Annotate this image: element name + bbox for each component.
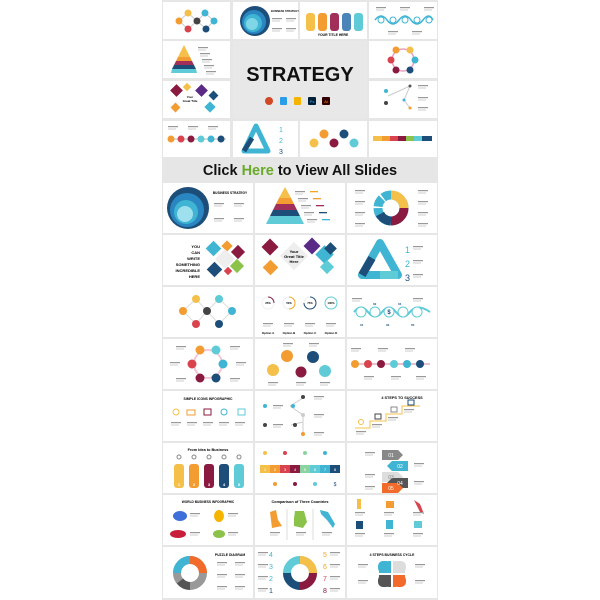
grid row 2: you can write: SOMETHING <box>176 262 200 267</box>
grid row 6: from idea to business: 3 <box>208 482 211 487</box>
grid row 2: you can write: HERE <box>189 274 200 279</box>
grid: percent rings: 75% <box>307 301 313 305</box>
top slide: hexagon circles <box>163 2 230 39</box>
grid: comparison of three countries: Comparison of Three Countries <box>272 500 328 504</box>
grid row 5: simple icons: SIMPLE ICONS INFOGRAPHIC <box>184 397 233 401</box>
top slide: triangle 123 <box>233 121 298 157</box>
grid row 2: you can write <box>163 235 253 285</box>
grid: 8 step arrow bar: $ <box>334 482 337 488</box>
grid row 6: from idea to business: 5 <box>238 482 241 487</box>
grid: 4 circles wave <box>255 339 345 389</box>
app icons: Ai <box>324 99 328 104</box>
grid: chevrons 01-05: 02 <box>397 464 403 470</box>
grid: triangle 123 <box>347 235 437 285</box>
app icons <box>265 97 330 105</box>
grid: 8 segment ring: 5 <box>323 552 327 559</box>
grid row 7: world business <box>163 495 253 545</box>
grid: 8 step arrow bar: 4 <box>294 467 297 472</box>
grid: 8 segment ring: 4 <box>269 552 273 559</box>
grid: percent rings: 50% <box>286 301 292 305</box>
grid: 8 segment ring: 6 <box>323 564 327 571</box>
top slide: ring of circles <box>369 41 437 78</box>
center panel: STRATEGY title: STRATEGY <box>246 64 354 86</box>
grid row 2: you can write: INCREDIBLE <box>176 268 200 273</box>
grid: your great title: Here <box>290 259 299 264</box>
grid: your great title: Great Title <box>284 254 305 259</box>
top slide: diamonds <box>163 81 230 118</box>
grid row 7: world business: WORLD BUSINESS INFOGRAPHIC <box>182 500 235 504</box>
grid: your great title: Your <box>290 249 299 254</box>
grid: comparison of three countries <box>255 495 345 545</box>
grid: 8 segment ring: 8 <box>323 588 327 595</box>
grid: 8 segment ring: 2 <box>269 576 273 583</box>
grid row 1: business strategy circles <box>163 183 253 233</box>
top slide: triangle 123: 1 <box>279 127 283 134</box>
grid: 8 step arrow bar: 7 <box>324 467 327 472</box>
grid: wave icons: $ <box>387 310 391 316</box>
grid: triangle 123: 3 <box>405 273 410 283</box>
grid: percent rings: Option D <box>325 331 338 335</box>
grid row 8: puzzle diagram <box>163 547 253 598</box>
top slide: pyramid <box>163 41 230 78</box>
grid: triangle 123: 1 <box>405 245 410 255</box>
grid: six country maps <box>347 495 437 545</box>
grid: chevrons 01-05: 04 <box>397 481 403 487</box>
grid: 8 step arrow bar: 2 <box>274 467 277 472</box>
top slide: wave <box>369 2 437 39</box>
grid: 8 step arrow bar <box>255 443 345 493</box>
top slide: triangle 123: 2 <box>279 138 283 145</box>
grid: 8 step arrow bar: 1 <box>264 467 267 472</box>
grid: percent rings: 25% <box>265 301 271 305</box>
grid: wave icons: 01 <box>360 323 364 327</box>
grid: 4 steps to success: 4 STEPS TO SUCCESS <box>381 396 423 400</box>
grid: percent rings: Option A <box>262 331 275 335</box>
grid row 2: you can write: YOU <box>191 244 200 249</box>
click here banner <box>163 159 437 181</box>
top slide: pills <box>300 2 367 39</box>
top slide: pills: YOUR TITLE HERE <box>318 33 349 37</box>
grid: 8 step arrow bar: 6 <box>314 467 317 472</box>
grid: chevrons 01-05: 05 <box>388 486 394 492</box>
grid: branch tree <box>255 391 345 441</box>
grid: 8 step arrow bar: 8 <box>334 467 337 472</box>
grid: triangle 123: 2 <box>405 259 410 269</box>
grid: circle timeline <box>347 339 437 389</box>
app icons: Ps <box>310 99 314 104</box>
top slide: diamonds: Your <box>187 95 194 99</box>
grid: 8 segment ring: 3 <box>269 564 273 571</box>
grid: gear <box>347 183 437 233</box>
grid: 4 steps business cycle <box>347 547 437 598</box>
grid row 5: simple icons <box>163 391 253 441</box>
grid: chevrons 01-05: 01 <box>388 453 394 459</box>
grid row 3: infinity circles <box>163 287 253 337</box>
grid: percent rings: Option B <box>283 331 296 335</box>
top slide: diamonds: Great Title <box>183 99 198 103</box>
top slide: 4 circles <box>300 121 367 157</box>
grid: wave icons <box>347 287 437 337</box>
grid: 4 steps to success <box>347 391 437 441</box>
grid row 6: from idea to business <box>163 443 253 493</box>
grid: wave icons: 02 <box>373 302 377 306</box>
top slide: business strategy circles <box>233 2 299 39</box>
grid: 8 segment ring: 7 <box>323 576 327 583</box>
grid row 8: puzzle diagram: PUZZLE DIAGRAM <box>215 553 245 557</box>
grid: 8 step arrow bar: 3 <box>284 467 287 472</box>
grid: pyramid <box>255 183 345 233</box>
grid row 6: from idea to business: 1 <box>178 482 181 487</box>
top slide: business strategy circles: BUSINESS STRATEGY <box>271 9 299 13</box>
grid: wave icons: 04 <box>398 302 402 306</box>
top slide: triangle 123: 3 <box>279 149 283 156</box>
grid: 8 segment ring: 1 <box>269 588 273 595</box>
grid: your great title <box>255 235 345 285</box>
grid row 2: you can write: CAN <box>191 250 200 255</box>
grid row 6: from idea to business: 4 <box>223 482 226 487</box>
grid row 6: from idea to business: From Idea to Business <box>188 448 228 452</box>
center panel: STRATEGY title <box>233 41 367 118</box>
top slide: circle row <box>163 121 230 157</box>
grid row 1: business strategy circles: BUSINESS STRATEGY <box>213 191 248 195</box>
grid: wave icons: 05 <box>411 323 415 327</box>
click here banner: Click Here to View All Slides <box>203 163 397 179</box>
top slide: colored bar <box>369 121 437 157</box>
grid: percent rings: Option C <box>304 331 317 335</box>
grid row 4: hexagon of circles <box>163 339 253 389</box>
grid: wave icons: 03 <box>386 323 390 327</box>
grid: chevrons 01-05 <box>347 443 437 493</box>
grid: 4 steps business cycle: 4 STEPS BUSINESS CYCLE <box>370 553 415 557</box>
top slide: tree <box>369 81 437 118</box>
grid: percent rings <box>255 287 345 337</box>
grid: chevrons 01-05: 03 <box>388 475 394 481</box>
grid row 6: from idea to business: 2 <box>193 482 196 487</box>
grid: percent rings: 100% <box>327 301 335 305</box>
grid: 8 segment ring <box>255 547 345 598</box>
grid: 8 step arrow bar: 5 <box>304 467 307 472</box>
grid row 2: you can write: WRITE <box>187 256 200 261</box>
